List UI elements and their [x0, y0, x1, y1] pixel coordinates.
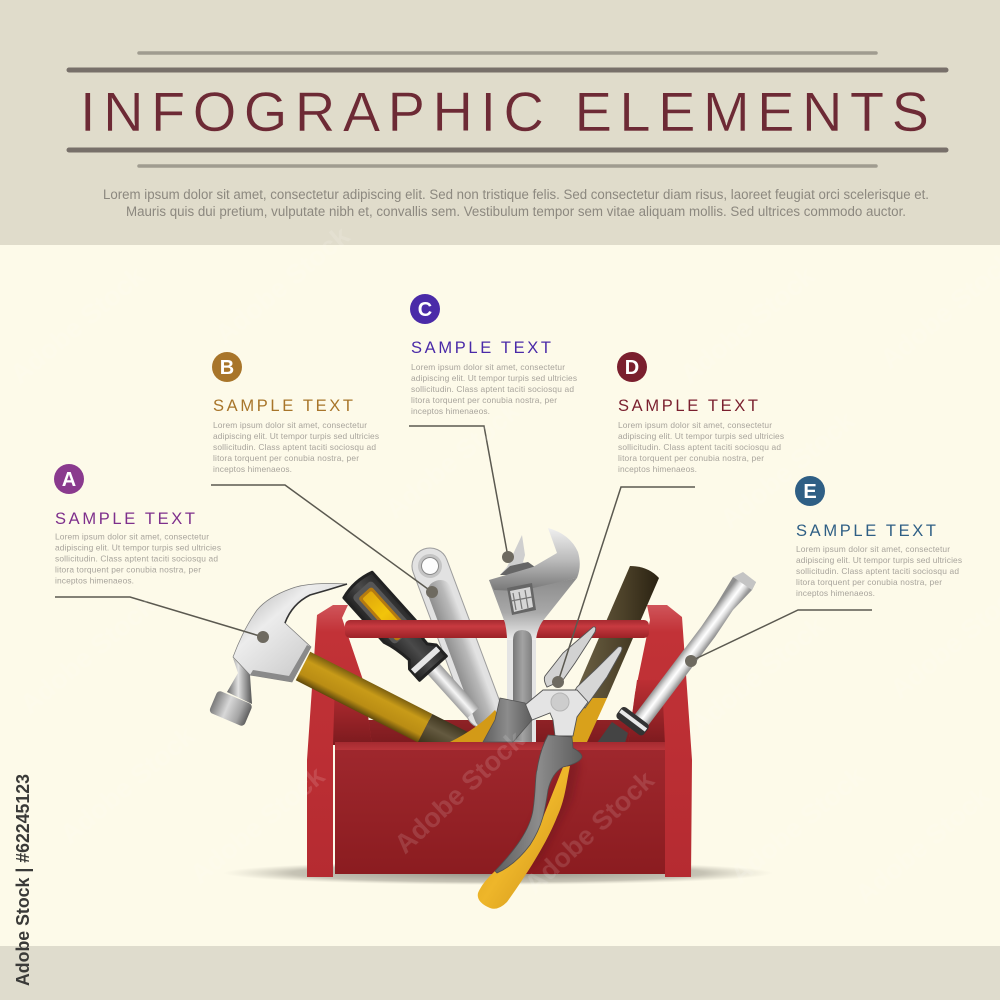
- leader E: [685, 610, 872, 667]
- body E: inceptos himenaeos.: [796, 588, 875, 598]
- heading C: SAMPLE TEXT: [411, 339, 551, 357]
- plier jaws: [525, 627, 622, 736]
- body C: sollicitudin. Class aptent taciti sociosqu ad: [411, 384, 574, 394]
- body B: Lorem ipsum dolor sit amet, consectetur: [213, 420, 367, 430]
- hammer face: [209, 690, 253, 727]
- body B: [213, 420, 379, 474]
- text: Adobe Stock: [725, 760, 871, 890]
- body A: Lorem ipsum dolor sit amet, consectetur: [55, 532, 209, 542]
- pliers: [450, 627, 622, 909]
- body E: [796, 544, 962, 598]
- hammer head: [233, 584, 347, 682]
- badge B: [212, 352, 242, 382]
- body E: sollicitudin. Class aptent taciti sociosqu ad: [796, 566, 959, 576]
- toolbox and tools illustration: [209, 528, 756, 909]
- toolbox back and end panels: [307, 605, 692, 877]
- body D: inceptos himenaeos.: [618, 464, 697, 474]
- intro text: [103, 187, 929, 219]
- body A: litora torquent per conubia nostra, per: [55, 564, 201, 574]
- body D: adipiscing elit. Ut tempor turpis sed ultricies: [618, 431, 784, 441]
- text: Adobe Stock: [5, 260, 151, 390]
- heading A: SAMPLE TEXT: [55, 510, 195, 528]
- badge A: [54, 464, 84, 494]
- callout E: [685, 476, 962, 667]
- footer band: [0, 946, 1000, 1000]
- callout B: [211, 352, 438, 598]
- body E: Lorem ipsum dolor sit amet, consectetur: [796, 544, 950, 554]
- text: Adobe Stock: [389, 724, 530, 859]
- leader C: [409, 426, 514, 563]
- text: Adobe Stock: [850, 780, 996, 910]
- badge D: D: [625, 357, 639, 379]
- right plier handle: [478, 735, 582, 909]
- body C: litora torquent per conubia nostra, per: [411, 395, 557, 405]
- body B: adipiscing elit. Ut tempor turpis sed ultricies: [213, 431, 379, 441]
- heading B: SAMPLE TEXT: [213, 397, 353, 415]
- dark hammer handle: [554, 566, 659, 742]
- badge C: [410, 294, 440, 324]
- badge E: E: [803, 481, 817, 503]
- body A: sollicitudin. Class aptent taciti sociosqu ad: [55, 554, 218, 564]
- body B: litora torquent per conubia nostra, per: [213, 453, 359, 463]
- heading D: SAMPLE TEXT: [618, 397, 758, 415]
- text: Adobe Stock: [15, 590, 161, 720]
- text: Adobe Stock: [55, 720, 201, 850]
- badge D: [617, 352, 647, 382]
- title: INFOGRAPHIC ELEMENTS: [80, 80, 929, 143]
- stock id vertical text: Adobe Stock | #62245123: [13, 774, 33, 986]
- text: Adobe Stock: [685, 610, 831, 740]
- intro text: Mauris quis dui pretium, vulputate nibh et, convallis sem. Vestibulum tempor sem vitae aliquam mollis. Sed ultrices commodo auctor.: [126, 204, 906, 219]
- text: Adobe Stock: [519, 764, 660, 899]
- body C: Lorem ipsum dolor sit amet, consectetur: [411, 362, 565, 372]
- body C: [411, 362, 577, 416]
- intro text: Lorem ipsum dolor sit amet, consectetur adipiscing elit. Sed non tristique felis. Sed consectetur diam risus, laoreet feugiat orci scelerisque et.: [103, 187, 929, 202]
- badge A: A: [62, 469, 76, 491]
- ring spanner: [407, 543, 507, 733]
- toolbox carrying bar: [345, 620, 649, 638]
- body E: adipiscing elit. Ut tempor turpis sed ultricies: [796, 555, 962, 565]
- badge E: [795, 476, 825, 506]
- body B: inceptos himenaeos.: [213, 464, 292, 474]
- body C: inceptos himenaeos.: [411, 406, 490, 416]
- body B: sollicitudin. Class aptent taciti sociosqu ad: [213, 442, 376, 452]
- heading E: SAMPLE TEXT: [796, 522, 936, 540]
- text: Adobe Stock: [185, 760, 331, 890]
- adjustable wrench: [489, 528, 580, 742]
- text: Adobe Stock: [210, 220, 356, 350]
- header band: [0, 0, 1000, 245]
- body D: Lorem ipsum dolor sit amet, consectetur: [618, 420, 772, 430]
- hammer handle: [296, 652, 477, 765]
- body D: [618, 420, 784, 474]
- toolbox front panel: [335, 742, 665, 874]
- hammer neck: [227, 658, 252, 704]
- text: Adobe Stock: [380, 395, 526, 525]
- body E: litora torquent per conubia nostra, per: [796, 577, 942, 587]
- body A: adipiscing elit. Ut tempor turpis sed ultricies: [55, 542, 221, 552]
- body A: [55, 532, 221, 586]
- text: Adobe Stock: [675, 260, 821, 390]
- badge B: B: [220, 357, 234, 379]
- right screwdriver: [597, 572, 756, 743]
- body D: litora torquent per conubia nostra, per: [618, 453, 764, 463]
- callout C: [409, 294, 577, 563]
- hammer: [209, 584, 477, 765]
- leader A: [55, 597, 269, 643]
- screwdriver with yellow handle: [342, 570, 487, 726]
- callout A: [54, 464, 269, 643]
- body C: adipiscing elit. Ut tempor turpis sed ultricies: [411, 373, 577, 383]
- text: Adobe Stock: [715, 405, 861, 535]
- ground shadow: [223, 861, 773, 885]
- badge C: C: [418, 299, 432, 321]
- body A: inceptos himenaeos.: [55, 576, 134, 586]
- leader B: [211, 485, 438, 598]
- body D: sollicitudin. Class aptent taciti sociosqu ad: [618, 442, 781, 452]
- plier handle shadow: [510, 748, 580, 880]
- leader D: [552, 487, 695, 688]
- left plier handle: [450, 698, 532, 742]
- callout D: [552, 352, 784, 688]
